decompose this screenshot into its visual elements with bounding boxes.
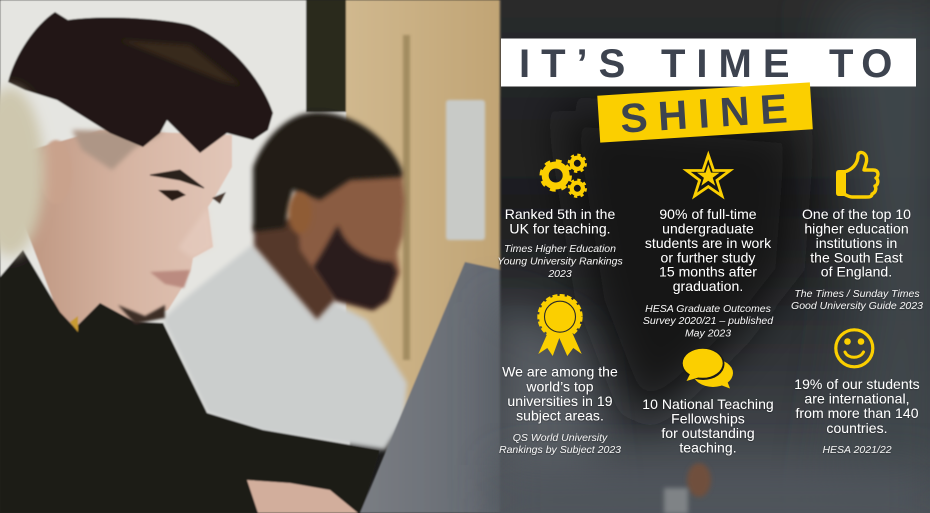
source: QS World University: [513, 432, 608, 444]
title line: TIME: [661, 42, 801, 86]
stat text: institutions in: [816, 235, 897, 251]
stat text: universities in 19: [507, 393, 613, 409]
stat text: the South East: [810, 249, 903, 265]
dark overlay panel: [495, 0, 930, 513]
icon: star: [687, 155, 730, 196]
stat text: UK for teaching.: [509, 220, 611, 236]
stat text: world’s top: [525, 378, 594, 394]
first student body: [0, 250, 380, 513]
temple fade: [72, 130, 165, 170]
dark pillar: [306, 0, 346, 112]
source: HESA 2021/22: [822, 444, 892, 456]
second student sweater: [163, 245, 407, 450]
stat text: teaching.: [679, 440, 737, 456]
stat text: graduation.: [673, 278, 743, 294]
blurred paper: [664, 488, 688, 513]
stat: subject rankings: [499, 295, 621, 456]
overlay base: [500, 0, 930, 513]
icon: rosette: [538, 295, 582, 356]
second student hair: [253, 112, 402, 232]
stat text: students are in work: [645, 235, 772, 251]
grey lower left tone: [495, 300, 600, 513]
source: Good University Guide 2023: [791, 300, 923, 312]
stat: international students: [794, 330, 920, 456]
laptop screen: [360, 262, 520, 513]
stat text: or further study: [661, 249, 755, 265]
wall background: [0, 0, 350, 513]
title line: IT’S: [519, 42, 636, 86]
source: Young University Rankings: [497, 256, 623, 268]
source: HESA Graduate Outcomes: [645, 303, 772, 315]
eye: [158, 190, 186, 201]
stat: graduate outcomes: [643, 155, 774, 339]
stat text: undergraduate: [662, 220, 754, 236]
collar: [70, 316, 78, 332]
stat text: We are among the: [502, 364, 618, 380]
second student neck: [254, 210, 335, 320]
stat text: Fellowships: [671, 410, 745, 426]
source: May 2023: [685, 327, 731, 339]
stat: teaching fellowships: [642, 348, 774, 456]
stat text: 90% of full-time: [659, 206, 757, 222]
wall sign: [446, 100, 485, 240]
hair highlight: [120, 40, 240, 85]
eyebrow: [150, 170, 204, 188]
door frame detail: [403, 35, 410, 360]
far eye: [212, 192, 226, 204]
stat text: for outstanding: [661, 425, 755, 441]
wooden door: [346, 0, 516, 420]
icon: speech bubbles: [682, 348, 733, 388]
highlight banner: [597, 82, 813, 143]
stat text: 10 National Teaching: [642, 396, 774, 412]
icon: smiley: [836, 330, 873, 367]
icon: gears: [542, 155, 586, 196]
title banner: [501, 38, 916, 86]
grey right tone: [830, 0, 930, 513]
photo: students at laptops: [0, 0, 520, 513]
second student ear: [288, 192, 312, 234]
stat: ranked 5th: [497, 155, 623, 280]
second student face: [295, 165, 405, 310]
nose shade: [178, 207, 213, 258]
source: Survey 2020/21 – published: [643, 315, 774, 327]
stat text: Ranked 5th in the: [505, 206, 615, 222]
source: The Times / Sunday Times: [794, 288, 920, 300]
source: Times Higher Education: [504, 243, 616, 255]
source: 2023: [547, 268, 572, 280]
shine word: SHINE: [619, 85, 799, 142]
lips: [150, 270, 190, 288]
stat text: countries.: [826, 420, 888, 436]
first student neck and face: [20, 130, 232, 328]
first student hand: [247, 480, 358, 513]
blurred hand: [687, 463, 711, 497]
stat: top 10 South East: [791, 152, 923, 312]
title line: TO: [829, 42, 901, 86]
yellow tag: [597, 82, 813, 143]
stat text: subject areas.: [516, 407, 604, 423]
source: Rankings by Subject 2023: [499, 444, 621, 456]
chin beard: [118, 305, 165, 324]
second student beard: [313, 225, 397, 310]
blurred foreground shoulder: [0, 88, 44, 256]
ear: [40, 140, 72, 204]
stat text: higher education: [804, 220, 909, 236]
stat text: of England.: [821, 264, 892, 280]
dark central shape: [560, 110, 800, 430]
stat text: 15 months after: [659, 264, 757, 280]
icon: thumbs up: [836, 152, 878, 197]
stat text: are international,: [804, 391, 910, 407]
grey lower tone: [500, 465, 930, 513]
first student hair: [8, 12, 273, 153]
stat text: from more than 140: [795, 405, 919, 421]
white title bar: [501, 38, 916, 86]
stat text: One of the top 10: [802, 206, 911, 222]
stat text: 19% of our students: [794, 376, 920, 392]
